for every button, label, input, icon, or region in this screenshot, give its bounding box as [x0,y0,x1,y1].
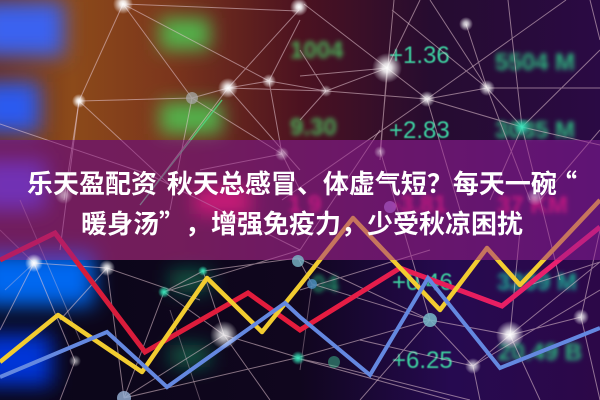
line chart: yellow series [0,200,600,372]
blurred red ticker figures [288,191,568,219]
blurred red ticker figures: 1 9 [288,191,321,218]
ticker numbers: blurred column: 1004 [290,37,344,64]
ticker numbers: sharp column: +0.46 [392,269,453,296]
blurred red ticker figures: 37 KM [497,192,568,219]
ticker numbers: sharp column: +6.25 [392,347,453,374]
ticker numbers: blurred column: 5504 M [495,49,575,76]
blurred blue screen blocks [0,2,94,386]
ticker numbers: blurred column: 3035 M [495,117,575,144]
ticker numbers: sharp column: +2.83 [389,117,450,144]
line chart: blue series [0,278,600,387]
ticker numbers: blurred column: 3209 M [497,269,577,296]
title: 乐天盈配资 秋天总感冒、体虚气短？每天一碗“ [27,164,577,201]
blurred green figures [160,18,222,367]
title [27,164,577,241]
title: 暖身汤”，增强免疫力，少受秋凉困扰 [81,204,523,241]
blurred red ticker figures: -3.81 [392,191,447,218]
ticker numbers: blurred column: 04 [312,271,339,298]
ticker numbers: sharp column [389,42,453,374]
title band [0,140,600,260]
ticker numbers: blurred column [290,37,582,366]
blurred red figures behind band [195,188,250,214]
ticker numbers: blurred column: 20.49 B [498,339,582,366]
ticker numbers: sharp column: +1.36 [389,42,450,69]
ticker numbers: blurred column: 9.30 [290,114,337,141]
line chart: red series [0,227,600,352]
